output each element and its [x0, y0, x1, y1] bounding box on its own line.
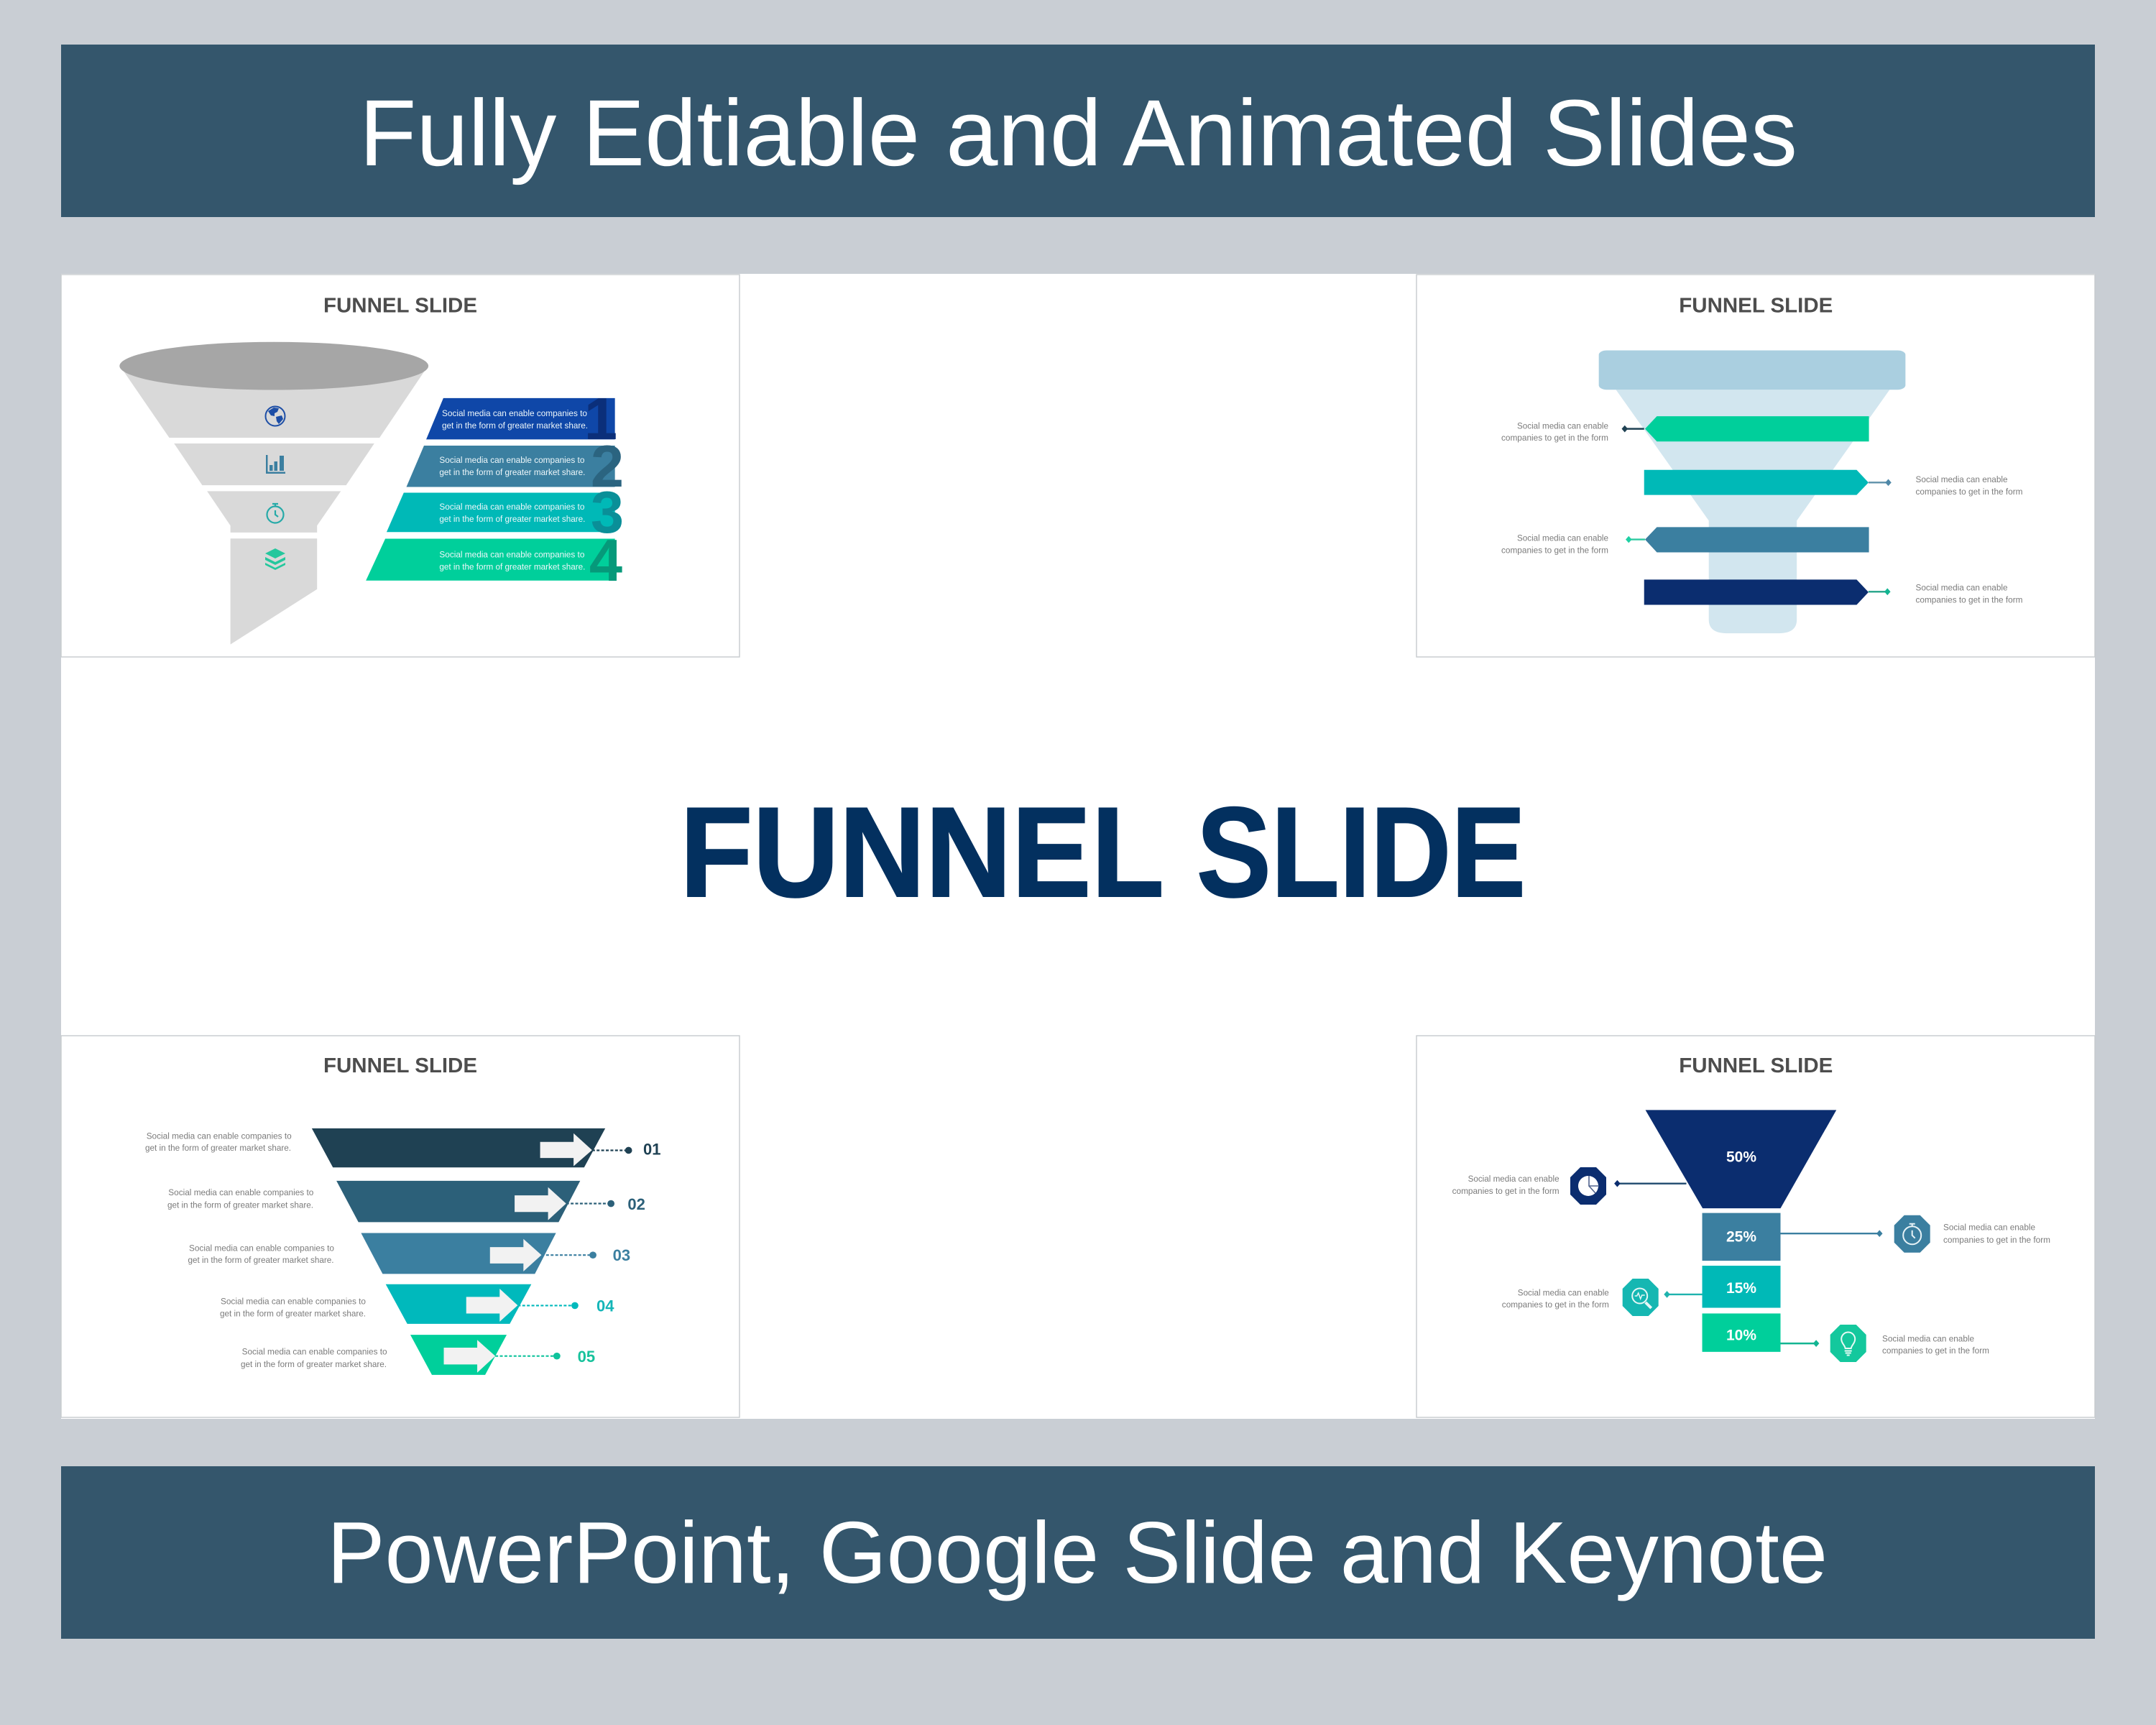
slide 2 descriptions: companies to get in the form — [1501, 433, 1608, 443]
tier descriptions: get in the form of greater market share. — [167, 1200, 313, 1210]
central title: SLIDE — [1197, 781, 1526, 924]
tier numbers: 03 — [613, 1246, 630, 1264]
icon: light bulb octagon — [1830, 1325, 1866, 1362]
panel: slide 4, percentage funnel — [1416, 1036, 2095, 1417]
tier descriptions: get in the form of greater market share. — [188, 1255, 333, 1265]
tier descriptions: get in the form of greater market share. — [220, 1309, 366, 1319]
bar descriptions: get in the form of greater market share. — [439, 562, 585, 572]
banner heading: top: Fully Edtiable and Animated Slides — [359, 80, 1797, 185]
slide 2 descriptions: companies to get in the form — [1501, 545, 1608, 555]
percentage labels: 25% — [1726, 1229, 1756, 1246]
tier numbers: 01 — [643, 1141, 661, 1159]
icon: bar chart — [266, 455, 285, 474]
slide 1 heading: FUNNEL SLIDE — [323, 294, 477, 317]
bar descriptions — [439, 408, 588, 572]
central title — [680, 781, 1526, 924]
icon: stopwatch octagon — [1894, 1215, 1930, 1253]
top banner — [61, 45, 2095, 217]
slide 2 descriptions: Social media can enable — [1517, 533, 1608, 543]
icon: pie chart octagon — [1570, 1167, 1606, 1205]
light blue funnel — [1599, 350, 1905, 633]
funnel blocks and connectors — [1614, 1110, 1883, 1352]
bar numbers — [584, 385, 624, 594]
tier descriptions: Social media can enable companies to — [242, 1347, 387, 1357]
bar descriptions: get in the form of greater market share. — [442, 420, 588, 431]
icon: globe — [266, 407, 285, 426]
slide 4 descriptions: companies to get in the form — [1502, 1300, 1609, 1310]
bar numbers: 2 — [591, 433, 624, 500]
slide 4 descriptions: Social media can enable — [1882, 1333, 1974, 1343]
tier descriptions — [145, 1131, 387, 1369]
banner heading: bottom: PowerPoint, Google Slide and Keynote — [327, 1504, 1828, 1601]
tier descriptions: get in the form of greater market share. — [241, 1359, 387, 1369]
slide 2 descriptions — [1501, 420, 2022, 604]
panel: slide 3, stacked trapezoid funnel — [61, 1036, 740, 1417]
bar descriptions: get in the form of greater market share. — [439, 467, 585, 477]
tier descriptions: Social media can enable companies to — [147, 1131, 292, 1141]
bar descriptions: get in the form of greater market share. — [439, 514, 585, 524]
slide 2 descriptions: companies to get in the form — [1916, 487, 2022, 497]
tier numbers: 05 — [578, 1348, 595, 1366]
central title: FUNNEL — [680, 781, 1164, 924]
tier descriptions: Social media can enable companies to — [221, 1296, 366, 1306]
tier descriptions: Social media can enable companies to — [168, 1187, 313, 1197]
slide 4 descriptions: companies to get in the form — [1882, 1346, 1989, 1356]
bottom banner — [61, 1466, 2095, 1639]
panel: slide 1, grey funnel with numbered bars — [61, 275, 740, 657]
icon: stacked layers — [265, 548, 285, 570]
tier numbers: 02 — [627, 1195, 645, 1213]
percentage labels: 15% — [1726, 1280, 1756, 1297]
slide 2 descriptions: companies to get in the form — [1916, 594, 2022, 604]
tier descriptions: Social media can enable companies to — [189, 1243, 334, 1253]
slide 4 descriptions: Social media can enable — [1468, 1174, 1560, 1184]
white content area — [61, 274, 2095, 1419]
slide 4 descriptions: Social media can enable — [1943, 1223, 2035, 1233]
tier numbers — [578, 1141, 661, 1366]
bar numbers: 3 — [591, 479, 624, 546]
slide 4 heading: FUNNEL SLIDE — [1679, 1054, 1833, 1077]
bar numbers: 4 — [589, 527, 622, 594]
slide 4 descriptions: companies to get in the form — [1943, 1235, 2050, 1245]
bar descriptions: Social media can enable companies to — [439, 502, 584, 512]
icon: stopwatch — [267, 504, 283, 523]
tier descriptions: get in the form of greater market share. — [145, 1143, 291, 1153]
slide 2 descriptions: Social media can enable — [1916, 582, 2008, 592]
slide 2 descriptions: Social media can enable — [1517, 420, 1608, 431]
panel: slide 2, light funnel with arrow bars — [1416, 275, 2095, 657]
numbered bars — [366, 398, 615, 581]
percentage labels: 50% — [1726, 1149, 1756, 1165]
slide 3 heading: FUNNEL SLIDE — [323, 1054, 477, 1077]
grey funnel shape — [119, 342, 428, 645]
slide 4 descriptions: Social media can enable — [1518, 1287, 1609, 1297]
tier numbers: 04 — [596, 1297, 614, 1315]
slide 4 descriptions — [1452, 1174, 2050, 1356]
arrow bars and connectors — [1622, 416, 1892, 604]
bar descriptions: Social media can enable companies to — [439, 550, 584, 560]
bar descriptions: Social media can enable companies to — [439, 455, 584, 465]
trapezoid tiers with arrows and dashed leaders — [312, 1128, 632, 1375]
icon: magnifier octagon — [1623, 1279, 1659, 1316]
bar descriptions: Social media can enable companies to — [442, 408, 587, 418]
slide 2 heading: FUNNEL SLIDE — [1679, 294, 1833, 317]
bar numbers: 1 — [584, 385, 617, 452]
percentage labels: 10% — [1726, 1328, 1756, 1344]
slide 4 descriptions: companies to get in the form — [1452, 1186, 1560, 1196]
slide 2 descriptions: Social media can enable — [1916, 474, 2008, 484]
percentage labels — [1726, 1149, 1756, 1344]
